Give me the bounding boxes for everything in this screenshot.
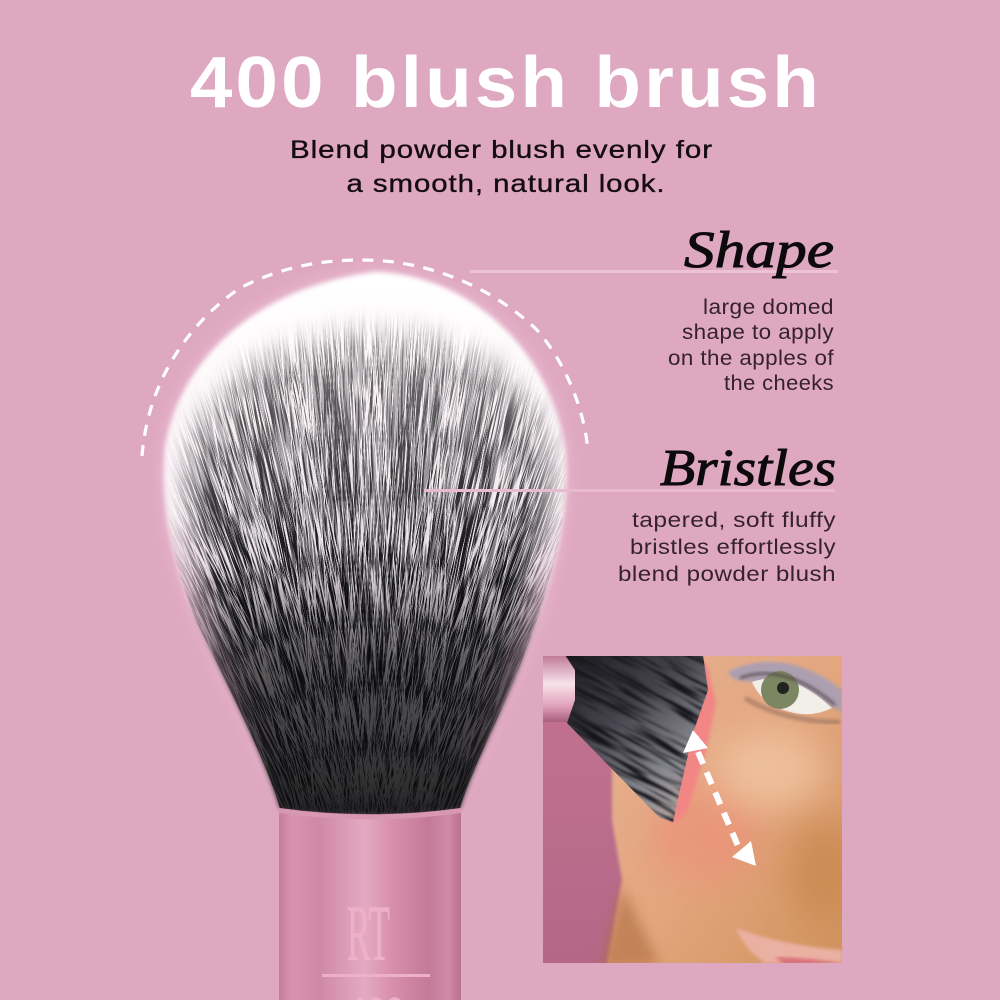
text: bristles description [618,509,836,586]
ferrule rim [279,808,461,820]
mini handle [543,656,576,722]
subtitle: Blend powder blush evenly for [290,136,713,164]
inner hair [166,312,566,814]
subtitle [290,136,713,198]
text: shape description [668,296,834,395]
text: bristles description: bristles effortlessly [630,536,836,559]
face [597,656,842,963]
arrow: blending direction [683,730,756,866]
dark strands [170,315,566,708]
eye [727,662,842,722]
photo: brush on cheek [543,656,842,963]
text: shape description: on the apples of [668,347,834,370]
heading: Bristles: Bristles [660,440,836,497]
text: shape description: large domed [703,296,834,319]
text: bristles description: blend powder blush [618,563,836,586]
subtitle: a smooth, natural look. [346,170,666,198]
dashed dome arc [142,260,588,456]
light strands [166,313,566,814]
brush glow [169,277,561,790]
text: shape description: the cheeks [724,372,834,395]
heading: Shape: Shape [684,222,834,279]
bristles [162,270,568,820]
title: 400 blush brush [190,43,822,123]
outer white tips [164,272,566,814]
text: shape description: shape to apply [682,321,834,344]
text: bristles description: tapered, soft fluffy [632,509,836,532]
leader line: bristles [424,489,835,492]
mini bristles [566,656,708,822]
brush handle: RT [347,891,390,978]
leader line: shape [470,270,838,273]
blush streak [670,660,717,823]
lower shading [202,586,534,814]
lips [736,928,842,963]
brush handle [279,800,461,1000]
handle rule [322,974,430,977]
